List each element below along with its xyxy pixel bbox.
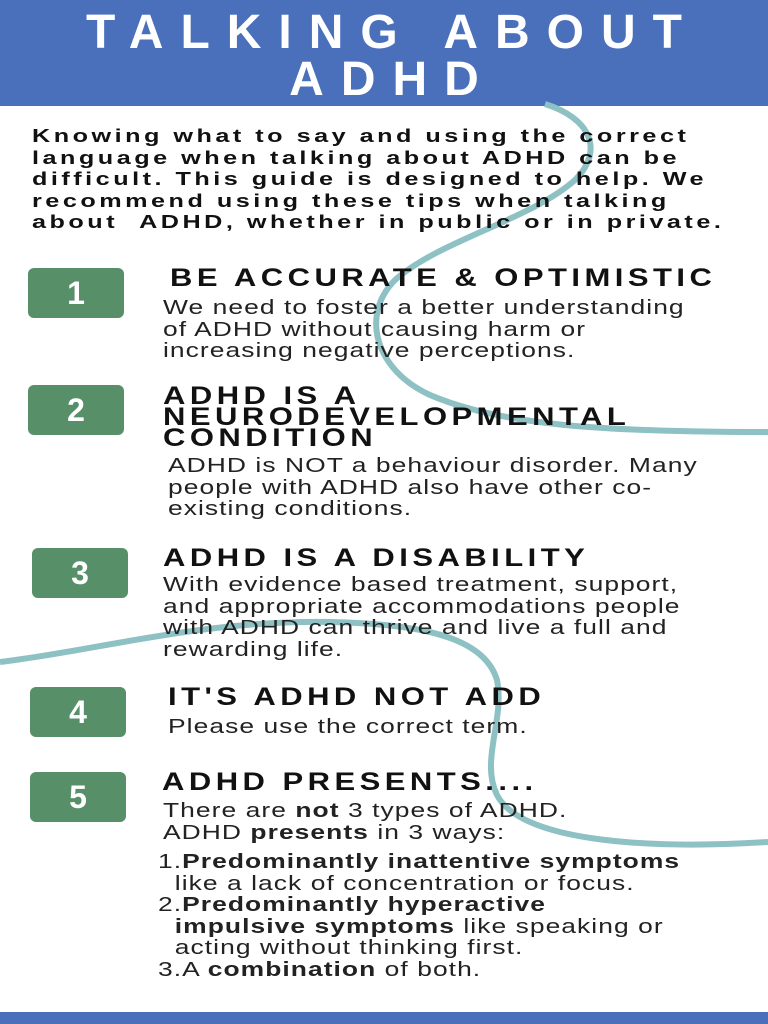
number box 1: 1 [67, 275, 85, 311]
text 5 [163, 800, 567, 844]
number box 4: 4 [69, 694, 87, 730]
intro text: Knowing what to say and using the correct [32, 126, 689, 146]
text 2: ADHD is NOT a behaviour disorder. Many [168, 455, 698, 477]
heading 1: BE ACCURATE & OPTIMISTIC [170, 264, 716, 292]
text 3: with ADHD can thrive and live a full and [163, 617, 667, 639]
list: 2.Predominantly hyperactive [158, 894, 546, 916]
item 5 [30, 768, 680, 981]
heading 2: ADHD IS A [163, 382, 360, 410]
list [158, 851, 680, 981]
number box 2 [28, 385, 124, 435]
list: acting without thinking first. [175, 937, 523, 959]
item 3 [32, 544, 681, 661]
item 4 [30, 683, 545, 738]
intro text [32, 126, 724, 232]
text 5: ADHD presents in 3 ways: [163, 822, 505, 844]
intro text: language when talking about ADHD can be [32, 148, 680, 168]
title: ADHD [289, 53, 496, 106]
list: impulsive symptoms like speaking or [175, 916, 664, 938]
text 3 [163, 574, 681, 661]
item 1 [28, 264, 716, 362]
title: TALKING ABOUT [86, 6, 699, 59]
list: 3.A combination of both. [158, 959, 481, 981]
text 2: people with ADHD also have other co- [168, 477, 652, 499]
heading 2 [163, 382, 630, 452]
text 2: existing conditions. [168, 498, 412, 520]
text 1: increasing negative perceptions. [163, 340, 575, 362]
list: like a lack of concentration or focus. [175, 873, 635, 895]
number box 5: 5 [69, 779, 87, 815]
title [86, 6, 699, 106]
heading 3: ADHD IS A DISABILITY [163, 544, 589, 572]
number box 5 [30, 772, 126, 822]
item 2 [28, 382, 698, 520]
heading 2: CONDITION [163, 424, 377, 452]
text 1 [163, 297, 685, 362]
text 2 [168, 455, 698, 520]
list: 1.Predominantly inattentive symptoms [158, 851, 680, 873]
heading 5: ADHD PRESENTS.... [162, 768, 538, 796]
heading 2: NEURODEVELOPMENTAL [163, 403, 630, 431]
intro text: about ADHD, whether in public or in private. [32, 212, 724, 232]
text 5: There are not 3 types of ADHD. [163, 800, 567, 822]
number box 1 [28, 268, 124, 318]
number box 4 [30, 687, 126, 737]
text 3: and appropriate accommodations people [163, 596, 681, 618]
number box 2: 2 [67, 392, 85, 428]
intro text: difficult. This guide is designed to help. We [32, 169, 707, 189]
text 3: With evidence based treatment, support, [163, 574, 678, 596]
heading 4: IT'S ADHD NOT ADD [168, 683, 545, 711]
text 4: Please use the correct term. [168, 716, 528, 738]
footer bar [0, 1012, 768, 1024]
number box 3: 3 [71, 555, 89, 591]
number box 3 [32, 548, 128, 598]
text 3: rewarding life. [163, 639, 343, 661]
text 1: of ADHD without causing harm or [163, 319, 586, 341]
intro text: recommend using these tips when talking [32, 190, 670, 210]
header bar [0, 0, 768, 106]
text 1: We need to foster a better understanding [163, 297, 685, 319]
